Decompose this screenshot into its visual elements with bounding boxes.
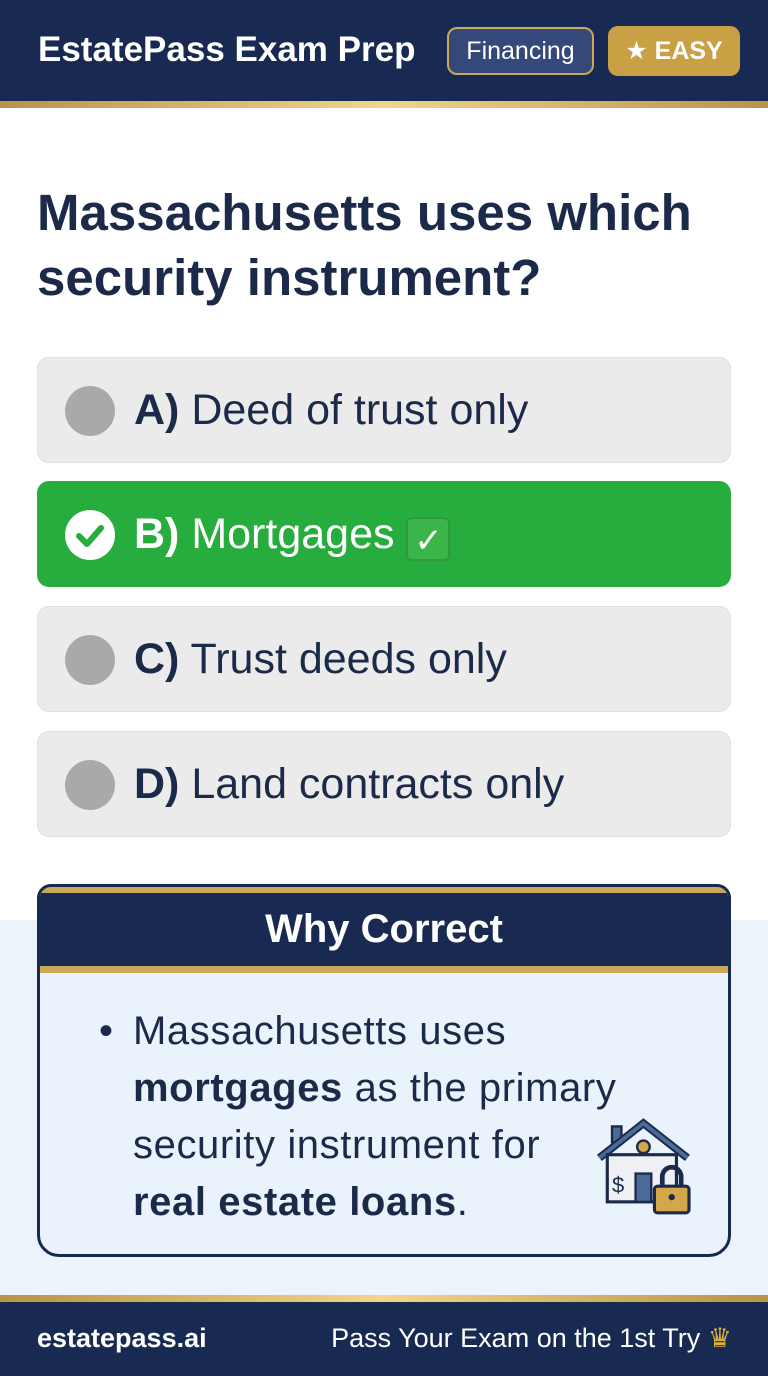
footer xyxy=(0,1302,768,1376)
header title: EstatePass Exam Prep xyxy=(38,30,415,69)
option D: D) Land contracts only xyxy=(134,760,564,808)
option C: C) Trust deeds only xyxy=(134,635,507,683)
option B correct: B) Mortgages xyxy=(134,510,394,558)
footer url: estatepass.ai xyxy=(37,1323,207,1353)
panel: why correct: • xyxy=(99,1009,114,1053)
explanation text: security instrument for xyxy=(133,1123,540,1167)
option B correct xyxy=(37,481,731,587)
explanation text: mortgages as the primary xyxy=(133,1066,616,1110)
background band xyxy=(0,920,768,1296)
explanation text xyxy=(99,1009,616,1224)
question heading: Massachusetts uses which security instrument? xyxy=(37,184,692,306)
explanation text: real estate loans. xyxy=(133,1180,468,1224)
badge: EASY xyxy=(608,26,740,76)
icon: house with lock xyxy=(597,1118,691,1214)
header bar xyxy=(0,0,768,101)
option A: A) Deed of trust only xyxy=(134,386,528,434)
option A xyxy=(37,357,731,463)
option B correct: ✓ xyxy=(414,522,443,560)
badge: EASY: ★ EASY xyxy=(625,37,723,65)
panel: why correct xyxy=(37,884,731,1257)
icon: house with lock: $ xyxy=(612,1172,624,1197)
badge: Financing xyxy=(447,27,594,75)
panel heading xyxy=(40,887,728,973)
explanation text: Massachusetts uses xyxy=(133,1009,506,1053)
footer tagline: Pass Your Exam on the 1st Try ♛ xyxy=(331,1323,732,1353)
badge: Financing: Financing xyxy=(466,37,575,65)
option D xyxy=(37,731,731,837)
option C xyxy=(37,606,731,712)
panel heading: Why Correct xyxy=(265,907,503,951)
